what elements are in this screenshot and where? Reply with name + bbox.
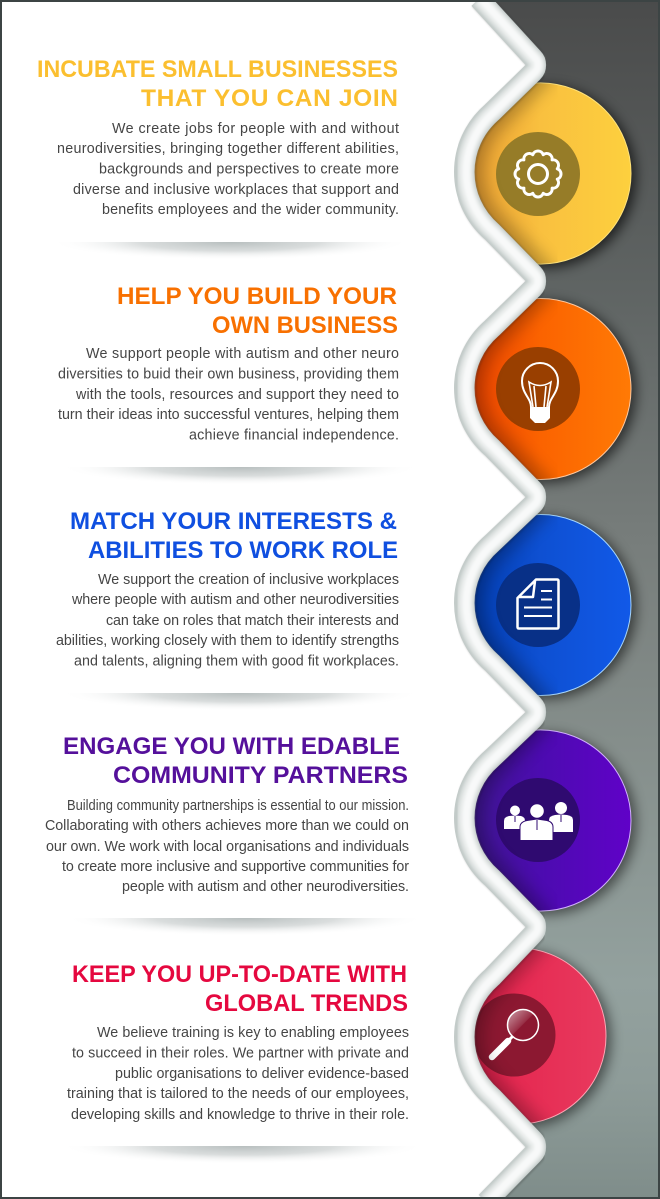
body text: people with autism and other neurodiversities. xyxy=(122,879,409,895)
shading of the band on the circles xyxy=(464,0,536,1199)
body text xyxy=(56,572,399,670)
shadow under section xyxy=(60,1146,425,1164)
body text: We create jobs for people with and without xyxy=(112,121,399,137)
icon: document xyxy=(518,580,558,628)
body text: turn their ideas into successful ventures, helping them xyxy=(58,407,399,423)
heading: THAT YOU CAN JOIN xyxy=(141,85,398,112)
body text: abilities, working closely with them to identify strengths xyxy=(56,633,399,649)
shadow under section xyxy=(50,242,410,260)
body text: backgrounds and perspectives to create more xyxy=(99,162,399,178)
heading: ABILITIES TO WORK ROLE xyxy=(88,537,398,564)
body text: Collaborating with others achieves more than we could on xyxy=(45,818,409,834)
circle: purple with people icon xyxy=(450,730,636,915)
heading xyxy=(37,56,398,112)
body text: neurodiversities, bringing together different abilities, xyxy=(57,141,399,157)
shadow under section xyxy=(65,918,425,936)
heading xyxy=(70,508,398,564)
body text xyxy=(45,798,409,895)
icon: magnifier xyxy=(492,1010,538,1057)
body text: We support the creation of inclusive workplaces xyxy=(98,572,399,588)
circle: yellow with gear icon xyxy=(450,83,636,268)
body text: achieve financial independence. xyxy=(189,428,399,444)
circle: blue with document icon xyxy=(450,514,636,699)
circle: orange with light bulb icon xyxy=(450,298,636,483)
heading xyxy=(63,733,408,789)
body text: training that is tailored to the needs of our employees, xyxy=(67,1086,409,1102)
heading: OWN BUSINESS xyxy=(212,312,398,339)
heading: ENGAGE YOU WITH EDABLE xyxy=(63,733,400,760)
section 1: incubate small businesses xyxy=(37,56,410,260)
body text: our own. We work with local organisations and individuals xyxy=(46,839,409,855)
section 2: help you build your own business xyxy=(58,283,420,485)
body text xyxy=(67,1025,409,1123)
body text: diversities to buid their own business, providing them xyxy=(58,366,399,382)
body text: to succeed in their roles. We partner with private and xyxy=(72,1046,409,1062)
section 3: match your interests xyxy=(56,508,420,711)
body text: diverse and inclusive workplaces that support and xyxy=(73,182,399,198)
body text: Building community partnerships is essential to our mission. xyxy=(67,798,409,814)
heading: KEEP YOU UP-TO-DATE WITH xyxy=(72,961,407,988)
body text: where people with autism and other neurodiversities xyxy=(71,592,399,608)
body text xyxy=(58,346,399,444)
heading xyxy=(72,961,408,1017)
heading: INCUBATE SMALL BUSINESSES xyxy=(37,56,398,83)
circle: red with magnifier icon xyxy=(430,948,611,1128)
icon: three people xyxy=(504,802,573,840)
body text: public organisations to deliver evidence-based xyxy=(115,1066,409,1082)
body text xyxy=(57,121,399,218)
body text: to create more inclusive and supportive communities for xyxy=(62,859,409,875)
heading: HELP YOU BUILD YOUR xyxy=(117,283,397,310)
shadow under section xyxy=(60,693,420,711)
heading: GLOBAL TRENDS xyxy=(205,990,408,1017)
wavy white ribbon divider xyxy=(464,0,538,1199)
body text: We believe training is key to enabling employees xyxy=(97,1025,409,1041)
body text: developing skills and knowledge to thrive in their role. xyxy=(71,1107,409,1123)
shadow under section xyxy=(60,467,420,485)
body text: We support people with autism and other neuro xyxy=(86,346,399,362)
heading: MATCH YOUR INTERESTS & xyxy=(70,508,397,535)
body text: and talents, aligning them with good fit workplaces. xyxy=(74,654,399,670)
icon: light bulb xyxy=(522,363,558,423)
body text: can take on roles that match their interests and xyxy=(106,613,399,629)
section 4: engage with community partners xyxy=(45,733,425,936)
body text: with the tools, resources and support they need to xyxy=(75,387,399,403)
heading xyxy=(117,283,398,339)
heading: COMMUNITY PARTNERS xyxy=(113,762,408,789)
section 5: global trends xyxy=(60,961,425,1164)
body text: benefits employees and the wider community. xyxy=(102,202,399,218)
icon: gear xyxy=(515,151,561,197)
